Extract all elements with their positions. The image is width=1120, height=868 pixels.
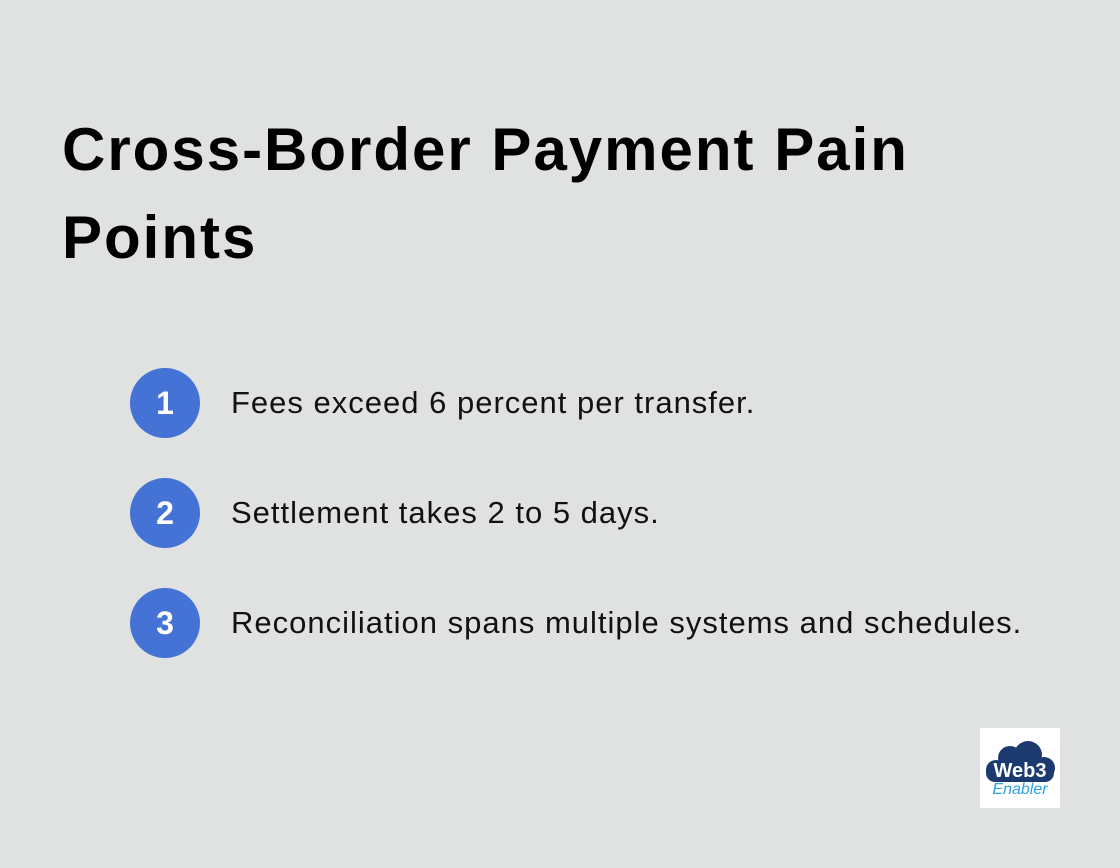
badge 1 <box>130 368 200 438</box>
logo: Enabler <box>992 781 1048 798</box>
badge 3: 3 <box>156 605 174 641</box>
title: Cross-Border Payment Pain Points <box>62 116 909 271</box>
badge 2: 2 <box>156 495 174 531</box>
item 2 <box>130 478 660 548</box>
badge 1: 1 <box>156 385 174 421</box>
badge 2 <box>130 478 200 548</box>
item 3 <box>130 588 1022 658</box>
text 3: Reconciliation spans multiple systems and schedules. <box>231 605 1022 640</box>
badge 3 <box>130 588 200 658</box>
text 1: Fees exceed 6 percent per transfer. <box>231 385 755 420</box>
logo: Web3 <box>994 760 1046 782</box>
logo <box>980 728 1060 808</box>
text 2: Settlement takes 2 to 5 days. <box>231 495 660 530</box>
item 1 <box>130 368 755 438</box>
